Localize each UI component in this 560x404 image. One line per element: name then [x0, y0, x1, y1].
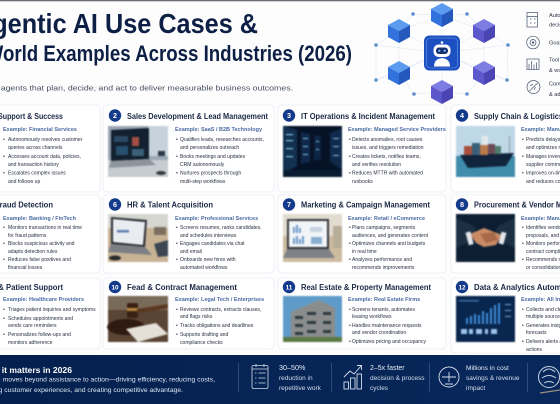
card text: [521, 127, 560, 185]
stat: repetitive work: [279, 363, 322, 392]
card text: Personalizes follow-ups and: [8, 332, 71, 338]
network illustration: AI agent connected to cubes: [374, 3, 510, 104]
card text: •: [3, 137, 5, 143]
card text: •: [349, 154, 351, 160]
card text: monitors adherence: [8, 340, 53, 346]
card text: Example: Real Estate Firms: [348, 297, 420, 303]
card text: •: [3, 332, 5, 338]
stat: faster decisions: [370, 365, 425, 392]
card text: Example: Healthcare Providers: [3, 297, 84, 303]
card text: [175, 127, 264, 185]
stat: repetitive work: repetitive work: [279, 385, 322, 392]
card text: •: [522, 307, 524, 313]
card text: and schedules interviews: [180, 233, 237, 239]
badge 12: 12: [458, 284, 466, 291]
card text: Creates tickets, notifies teams,: [352, 154, 421, 160]
icon: context compass: [527, 80, 540, 94]
photo: laptop on desk: [107, 214, 169, 263]
card 9: patient support: [0, 278, 100, 349]
card text: CRM autonomously: [180, 162, 225, 168]
card text: •: [3, 170, 5, 176]
card text: Tracks obligations and deadlines: [180, 323, 254, 329]
card 7: marketing: [278, 195, 446, 273]
card text: recommends improvements: [352, 265, 415, 271]
card text: •: [349, 225, 351, 231]
card text: Blocks suspicious activity and: [8, 241, 75, 247]
card text: [348, 297, 427, 345]
card 4: supply chain: [451, 105, 560, 192]
card text: forecasts: [526, 330, 547, 336]
card text: Example: Managed Service Providers: [348, 127, 446, 133]
card text: •: [176, 154, 178, 160]
photo: handshake: [455, 213, 516, 263]
icon: tools chart: [527, 59, 539, 70]
badge 7: [283, 198, 295, 211]
photo: apartment building: [282, 295, 343, 343]
card 10: contract management: [103, 278, 274, 349]
card text: •: [522, 323, 524, 329]
badge 2: 2: [113, 111, 117, 120]
card text: •: [522, 154, 524, 160]
card text: •: [176, 241, 178, 247]
badge 7: 7: [287, 200, 291, 209]
card text: Triages patient inquiries and symptoms: [8, 307, 96, 313]
card text: [3, 297, 96, 346]
card text: in real time: [352, 249, 377, 255]
badge 10: 10: [111, 284, 119, 291]
card text: [175, 216, 262, 271]
badge 8: 8: [460, 200, 464, 209]
card text: •: [176, 307, 178, 313]
icon: robot app tile: [424, 36, 460, 70]
badge 4: 4: [460, 111, 464, 120]
card text: [175, 297, 264, 346]
badge 12: [456, 281, 468, 293]
photo: container ship: [455, 125, 516, 178]
badge 11: 11: [286, 284, 293, 291]
icon: goal target: [527, 36, 539, 49]
heading: IT Operations & Incident Management: [301, 111, 435, 121]
card 1: customer support: [0, 105, 100, 192]
card text: Escalates complex issues: [8, 170, 66, 176]
badge 6: [109, 198, 121, 211]
card text: [348, 127, 446, 185]
card text: •: [3, 225, 5, 231]
stat: cost savings: impact: [466, 385, 485, 392]
badge 8: [456, 198, 468, 211]
card text: Example: Financial Services: [3, 127, 77, 133]
card text: [3, 216, 82, 271]
icon: competitive edge: [538, 366, 560, 393]
footer message: [0, 365, 215, 394]
card text: •: [522, 241, 524, 247]
card text: Handles maintenance requests: [352, 323, 422, 329]
heading: Real Estate & Property Management: [301, 282, 431, 292]
card text: and follows up: [8, 179, 40, 185]
card 5: fraud detection: [0, 195, 100, 273]
feature list: [527, 12, 560, 98]
icon: rising bar chart: [344, 366, 362, 389]
card text: •: [349, 323, 351, 329]
card text: Optimizes channels and budgets: [352, 241, 426, 247]
photo: laptop with charts: [282, 214, 343, 263]
card text: •: [3, 307, 5, 313]
card text: compliance checks: [180, 340, 223, 346]
photo: gavel and papers: [106, 295, 169, 343]
card text: [521, 216, 560, 271]
card text: Autonomously resolves customer: [8, 137, 83, 143]
heading: Marketing & Campaign Management: [301, 200, 430, 210]
icon: checklist: [252, 364, 268, 388]
badge 3: 3: [287, 111, 291, 120]
card text: Analyzes performance and: [352, 257, 412, 263]
card text: Reduces MTTR with automated: [352, 170, 423, 176]
card text: Detects anomalies, root causes: [352, 137, 423, 143]
card text: and email: [180, 249, 202, 255]
card text: queries across channels: [8, 145, 63, 151]
badge 10: [109, 281, 121, 293]
icon: savings gauge: [439, 367, 459, 387]
card 8: procurement: [451, 195, 560, 273]
card text: leasing workflows: [352, 314, 392, 320]
card text: •: [349, 257, 351, 263]
card text: •: [176, 257, 178, 263]
stat: repetitive work: reduction in: [279, 375, 313, 382]
photo: analytics dashboard: [454, 294, 516, 344]
card text: •: [176, 323, 178, 329]
card text: Screens resumes, ranks candidates,: [180, 225, 262, 231]
card text: •: [3, 257, 5, 263]
photo: laptop with dashboard: [107, 125, 169, 178]
title: [0, 8, 352, 66]
card text: automated workflows: [180, 265, 228, 271]
card text: Example: Retail / eCommerce: [348, 216, 425, 222]
icon: dashboard window: [527, 12, 538, 27]
card text: •: [522, 225, 524, 231]
card text: Qualifies leads, researches accounts,: [180, 137, 264, 143]
card text: Engages candidates via chat: [180, 241, 245, 247]
stat: cost savings: Millions in cost: [466, 365, 509, 372]
card text: •: [522, 257, 524, 263]
card text: •: [3, 241, 5, 247]
card text: •: [349, 170, 351, 176]
card text: •: [176, 225, 178, 231]
card text: Supports drafting and: [180, 332, 228, 338]
card 6: HR and talent: [103, 195, 274, 273]
card text: and transaction history: [8, 162, 59, 168]
card text: runbooks: [352, 179, 373, 185]
footer band: [0, 355, 560, 404]
card text: Reviews contracts, extracts clauses,: [180, 307, 261, 313]
card text: Plans campaigns, segments: [352, 225, 416, 231]
card text: Books meetings and updates: [180, 154, 246, 160]
card text: •: [522, 339, 524, 345]
stat: faster decisions: cycles: [370, 385, 389, 392]
badge 3: [283, 109, 295, 122]
card text: audiences, and generates content: [352, 233, 429, 239]
card text: •: [349, 137, 351, 143]
card text: and personalizes outreach: [180, 145, 239, 151]
heading: Fead & Contract Management: [127, 282, 237, 292]
card text: Example: Professional Services: [175, 216, 258, 222]
card text: Example: Legal Tech / Enterprises: [175, 297, 264, 303]
card text: [348, 216, 429, 271]
card text: sends care reminders: [8, 323, 57, 329]
stat: cost savings: savings & revenue: [466, 375, 520, 382]
card text: •: [176, 137, 178, 143]
card text: •: [176, 332, 178, 338]
card 11: real estate: [278, 278, 446, 349]
card text: [521, 297, 560, 353]
card text: and verifies resolution: [352, 162, 401, 168]
card text: issues, and triggers remediation: [352, 145, 424, 151]
heading: Sales Development & Lead Management: [127, 111, 268, 121]
card text: •: [522, 170, 524, 176]
card text: and flags risks: [180, 314, 213, 320]
card text: •: [176, 170, 178, 176]
card text: Nurtures prospects through: [180, 170, 241, 176]
card text: actions: [526, 347, 542, 353]
card 2: sales development: [103, 105, 274, 192]
card text: Reduces false positives and: [8, 257, 71, 263]
card text: Predicts delays: [526, 137, 560, 143]
card text: multi-step workflows: [180, 179, 226, 185]
badge 4: [456, 109, 468, 122]
stat: faster decisions: decision & process: [370, 375, 425, 382]
card text: •: [3, 154, 5, 160]
card text: Onboards new hires with: [180, 257, 236, 263]
card text: adapts detection rules: [8, 249, 58, 255]
card text: for fraud patterns: [8, 233, 47, 239]
card text: •: [349, 339, 351, 345]
card text: •: [522, 137, 524, 143]
badge 6: 6: [113, 200, 117, 209]
card text: •: [349, 307, 351, 313]
badge 2: [109, 109, 121, 122]
card text: Optimizes pricing and occupancy: [352, 339, 427, 345]
badge 11: [283, 281, 295, 293]
stat: cost savings: [466, 365, 520, 392]
card text: Accesses account data, policies,: [8, 154, 81, 160]
stat: repetitive work: 30–50%: [279, 363, 306, 372]
card text: Schedules appointments and: [8, 316, 73, 322]
card text: •: [3, 316, 5, 322]
photo: server room: [282, 124, 344, 178]
stat: faster decisions: 2–5x faster: [370, 365, 405, 372]
card text: Example: SaaS / B2B Technology: [175, 127, 263, 133]
card text: and vendor coordination: [352, 330, 406, 336]
card 3: IT operations: [278, 105, 446, 192]
card text: [3, 127, 83, 185]
card text: Example: Banking / FinTech: [3, 216, 77, 222]
card text: •: [349, 241, 351, 247]
card text: Screens tenants, automates: [352, 307, 415, 313]
card text: Monitors transactions in real time: [8, 225, 82, 231]
heading: HR & Talent Acquisition: [127, 200, 213, 210]
card text: financial losses: [8, 265, 43, 271]
card 12: data and analytics: [451, 278, 560, 353]
